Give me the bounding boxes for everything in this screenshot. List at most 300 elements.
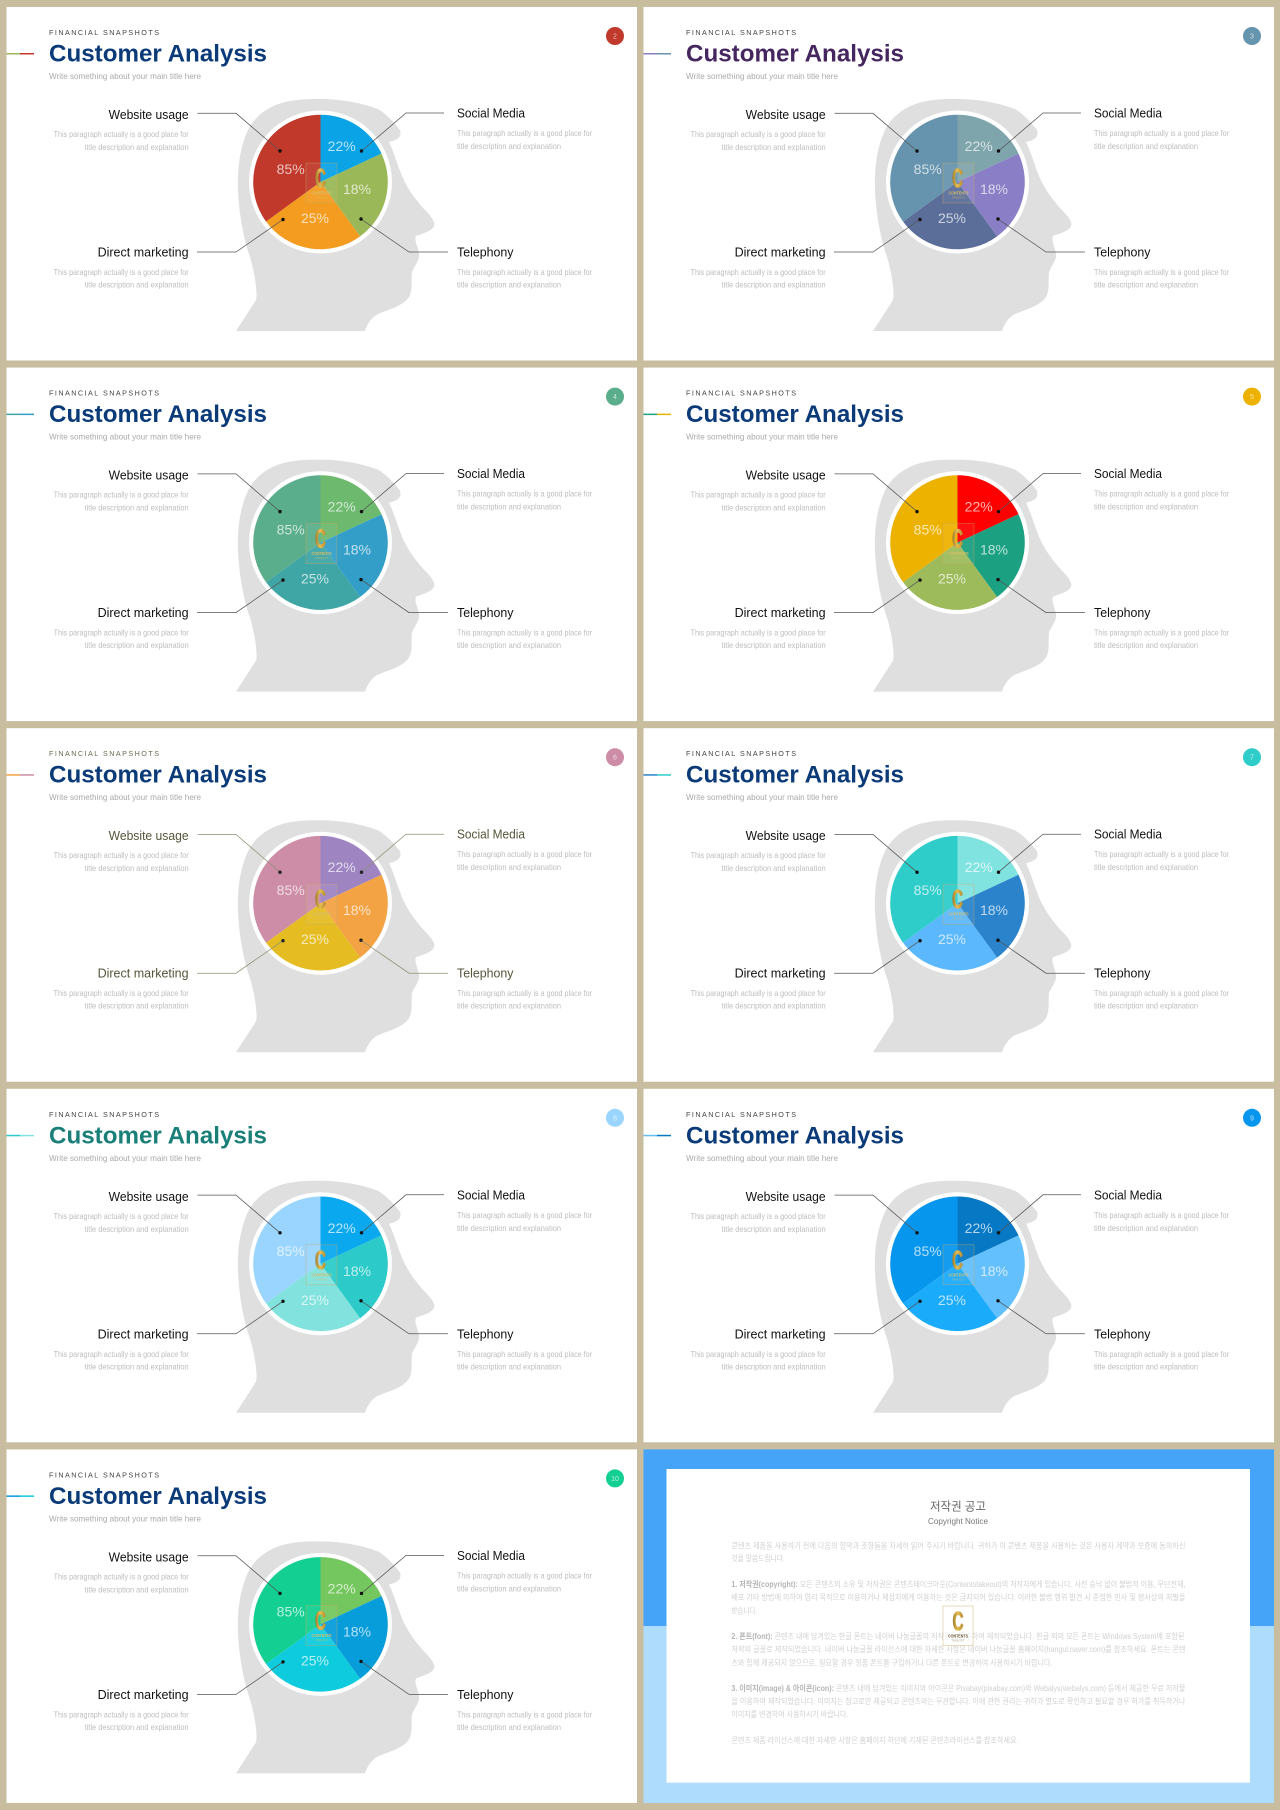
label: telephony: title description and explanation	[1094, 280, 1198, 290]
label: direct marketing: This paragraph actually is a good place for	[691, 268, 826, 277]
page badge	[606, 388, 624, 406]
label: website usage: title description and explanation	[85, 143, 189, 152]
label: telephony: This paragraph actually is a good place for	[457, 989, 592, 998]
logo watermark: CONTENTS	[948, 190, 969, 196]
panel: slide 6	[6, 728, 637, 1082]
label: telephony: title description and explanation	[457, 1002, 561, 1011]
leader lines	[197, 1195, 448, 1334]
label: social media: title description and explanation	[1094, 1224, 1198, 1233]
leader lines	[834, 113, 1085, 252]
label: direct marketing: This paragraph actually is a good place for	[691, 989, 826, 998]
label: social media: title description and explanation	[457, 142, 561, 151]
logo watermark: TAKEOUT	[315, 1638, 328, 1642]
pie chart: 22%	[328, 1220, 356, 1236]
title: Customer Analysis	[686, 401, 904, 428]
logo watermark: CONTENTS	[948, 1634, 968, 1638]
label: direct marketing: Direct marketing	[98, 967, 189, 981]
logo watermark: TAKEOUT	[315, 556, 328, 560]
title: Customer Analysis	[49, 1122, 267, 1149]
pie chart: 22%	[328, 1580, 356, 1596]
label: direct marketing: title description and explanation	[722, 641, 826, 650]
logo watermark: C	[952, 1245, 963, 1275]
pie chart: 22%	[328, 499, 356, 515]
panel: slide 8	[6, 1089, 637, 1442]
page badge: 7	[1250, 755, 1254, 762]
copyright body text: 것을 말씀드립니다.	[731, 1553, 785, 1563]
label: telephony: This paragraph actually is a good place for	[1094, 629, 1229, 638]
label: website usage	[54, 1550, 189, 1594]
label: website usage: This paragraph actually is a good place for	[691, 1212, 826, 1221]
title: Customer Analysis	[686, 762, 904, 789]
label: direct marketing	[691, 967, 826, 1011]
logo watermark	[306, 1605, 337, 1645]
label: telephony	[457, 967, 592, 1011]
leader lines	[834, 1195, 1085, 1334]
page badge: 9	[1250, 1115, 1254, 1122]
icon: head silhouette	[873, 460, 1071, 692]
label: telephony: title description and explanation	[457, 1362, 561, 1371]
eyebrow: FINANCIAL SNAPSHOTS	[49, 389, 159, 398]
logo watermark	[943, 524, 974, 564]
logo watermark	[306, 884, 337, 924]
copyright body text: 저작의 글꼴로 제작되었습니다. 네이버 나눔글꼴 라이선스에 대한 자세한 사항은 네이버 나눔글꼴 홈페이지(hangul.naver.com)를 참조하세요. 폰트는 콘텐	[731, 1644, 1185, 1654]
accent line	[6, 1135, 34, 1136]
label: direct marketing: This paragraph actually is a good place for	[54, 1350, 189, 1359]
label: social media: This paragraph actually is a good place for	[457, 1571, 592, 1580]
leader lines	[197, 834, 448, 973]
label: website usage: title description and explanation	[85, 1585, 189, 1594]
label: direct marketing: title description and explanation	[722, 1002, 826, 1011]
eyebrow: FINANCIAL SNAPSHOTS	[686, 1110, 796, 1119]
page badge: 2	[613, 34, 617, 40]
label: direct marketing	[54, 606, 189, 650]
panel: slide 10	[6, 1449, 637, 1803]
label: direct marketing	[691, 246, 826, 290]
label: website usage: This paragraph actually is a good place for	[54, 851, 189, 860]
label: social media: Social Media	[457, 106, 525, 120]
page badge: 8	[613, 1115, 617, 1122]
icon: head silhouette	[236, 1541, 434, 1773]
label: website usage: This paragraph actually is a good place for	[54, 491, 189, 500]
label: website usage	[54, 469, 189, 513]
label: direct marketing: This paragraph actually is a good place for	[54, 989, 189, 998]
icon: head silhouette	[873, 1181, 1071, 1413]
label: social media: This paragraph actually is a good place for	[1094, 1211, 1229, 1220]
label: website usage: title description and explanation	[85, 1225, 189, 1234]
icon: head silhouette	[873, 99, 1071, 331]
label: social media	[1094, 828, 1229, 872]
title: Customer Analysis	[49, 762, 267, 789]
title: Customer Analysis	[49, 1483, 267, 1510]
page badge	[1243, 27, 1261, 45]
accent line	[6, 53, 34, 54]
subtitle: Write something about your main title here	[49, 433, 201, 442]
label: telephony: title description and explanation	[457, 641, 561, 650]
label: social media: title description and explanation	[457, 1224, 561, 1233]
logo watermark: TAKEOUT	[951, 1638, 965, 1642]
logo watermark	[306, 163, 337, 203]
label: direct marketing: title description and explanation	[85, 641, 189, 650]
label: direct marketing: This paragraph actually is a good place for	[54, 1710, 189, 1719]
logo watermark: C	[315, 1245, 326, 1275]
label: telephony: title description and explanation	[1094, 641, 1198, 650]
label: social media: title description and explanation	[457, 863, 561, 872]
pie chart: 85%	[914, 522, 942, 538]
page badge: 10	[611, 1476, 619, 1483]
pie chart	[249, 471, 392, 614]
pie chart: 25%	[938, 571, 966, 587]
label: website usage: title description and explanation	[85, 504, 189, 513]
eyebrow: FINANCIAL SNAPSHOTS	[49, 1470, 159, 1479]
logo watermark: TAKEOUT	[952, 917, 965, 921]
page badge: 5	[1250, 394, 1254, 401]
label: social media: title description and explanation	[1094, 142, 1198, 151]
copyright body text: 3. 이미지(image) & 아이콘(icon): 콘텐츠 내에 담겨있는 이미지와 아이콘은 Pixabay(pixabay.com)와 Webalys(webalys.com) 등에서 제공한 무료 저작물	[731, 1683, 1185, 1693]
pie chart: 22%	[965, 138, 993, 154]
label: telephony: This paragraph actually is a good place for	[1094, 989, 1229, 998]
pie chart	[886, 110, 1029, 254]
leader lines	[834, 834, 1085, 973]
title: Customer Analysis	[49, 40, 267, 68]
label: telephony	[1094, 967, 1229, 1011]
label: telephony: Telephony	[1094, 1327, 1151, 1341]
pie chart: 85%	[914, 161, 942, 177]
icon: head silhouette	[236, 820, 434, 1052]
pie chart: 85%	[277, 1603, 305, 1619]
label: social media: This paragraph actually is a good place for	[457, 850, 592, 859]
label: website usage: Website usage	[109, 1550, 189, 1564]
label: social media: Social Media	[457, 467, 525, 481]
logo watermark: TAKEOUT	[315, 1277, 328, 1281]
copyright body text: 배포 기타 방법에 의하여 영리 목적으로 이용하거나 제삼자에게 이용하는 것은 금지되어 있습니다. 이러한 불법 행위 발견 시 준엄한 민사 및 형사상의 처벌을	[731, 1592, 1185, 1602]
label: direct marketing: This paragraph actually is a good place for	[691, 1350, 826, 1359]
label: direct marketing: This paragraph actually is a good place for	[54, 268, 189, 277]
accent line	[644, 774, 671, 776]
eyebrow: FINANCIAL SNAPSHOTS	[49, 1110, 159, 1119]
logo watermark: CONTENTS	[312, 1633, 332, 1638]
pie chart: 18%	[343, 181, 371, 197]
label: direct marketing: Direct marketing	[98, 606, 189, 620]
label: social media	[457, 1188, 592, 1233]
label: telephony	[457, 246, 592, 290]
label: social media: Social Media	[457, 828, 525, 842]
label: direct marketing	[54, 246, 189, 290]
logo watermark: C	[315, 524, 326, 554]
logo watermark: CONTENTS	[312, 190, 332, 196]
accent line	[6, 414, 34, 415]
subtitle: Write something about your main title here	[49, 72, 201, 81]
eyebrow: FINANCIAL SNAPSHOTS	[686, 389, 796, 398]
logo watermark: C	[952, 884, 963, 914]
label: social media	[457, 1549, 592, 1593]
copyright body text: 이미지를 변경하여 사용하시기 바랍니다.	[731, 1709, 848, 1719]
leader lines	[834, 474, 1085, 613]
label: social media: title description and explanation	[1094, 863, 1198, 872]
label: direct marketing	[691, 1327, 826, 1371]
subtitle: Write something about your main title here	[686, 433, 838, 442]
label: social media	[457, 106, 592, 151]
label: telephony	[1094, 246, 1229, 290]
label: social media: Social Media	[457, 1188, 525, 1202]
logo watermark: CONTENTS	[312, 551, 332, 556]
label: website usage	[691, 108, 826, 152]
label: social media	[457, 467, 592, 512]
logo watermark: TAKEOUT	[952, 196, 965, 200]
panel: slide 9	[644, 1089, 1274, 1442]
pie chart: 22%	[328, 859, 356, 875]
label: direct marketing: Direct marketing	[735, 967, 826, 981]
logo watermark: CONTENTS	[948, 551, 969, 556]
label: website usage: Website usage	[746, 1190, 826, 1204]
label: social media: Social Media	[1094, 1188, 1162, 1202]
panel: slide 5	[644, 368, 1274, 721]
label: direct marketing: Direct marketing	[735, 606, 826, 620]
title: Customer Analysis	[686, 40, 904, 68]
label: direct marketing: Direct marketing	[98, 246, 189, 260]
label: direct marketing: title description and explanation	[85, 1723, 189, 1732]
logo watermark: C	[952, 163, 963, 193]
label: telephony: title description and explanation	[1094, 1362, 1198, 1371]
pie chart: 25%	[938, 1292, 966, 1308]
label: website usage: title description and explanation	[722, 143, 826, 152]
label: telephony: This paragraph actually is a good place for	[1094, 268, 1229, 277]
pie chart: 22%	[965, 859, 993, 875]
label: direct marketing	[54, 1327, 189, 1371]
panel: copyright notice	[644, 1449, 1274, 1803]
label: telephony	[457, 1327, 592, 1371]
label: website usage	[54, 1190, 189, 1234]
logo watermark: CONTENTS	[948, 912, 969, 917]
pie chart: 25%	[301, 1292, 329, 1308]
label: telephony: Telephony	[457, 1688, 514, 1702]
label: social media: This paragraph actually is a good place for	[1094, 850, 1229, 859]
label: social media: This paragraph actually is a good place for	[457, 1211, 592, 1220]
panel: slide 4	[6, 368, 637, 721]
logo watermark: CONTENTS	[312, 912, 332, 917]
label: telephony	[1094, 606, 1229, 650]
panel: slide 7	[644, 728, 1274, 1082]
pie chart	[249, 1192, 392, 1335]
page badge: 6	[613, 755, 617, 762]
pie chart: 18%	[980, 542, 1008, 558]
page badge	[606, 748, 624, 766]
label: website usage	[691, 469, 826, 513]
logo watermark: TAKEOUT	[952, 1277, 965, 1281]
pie chart: 18%	[980, 181, 1008, 197]
copyright body text: 받습니다.	[731, 1606, 757, 1616]
label: social media: This paragraph actually is a good place for	[457, 129, 592, 138]
logo watermark: C	[952, 524, 963, 554]
label: website usage: This paragraph actually is a good place for	[691, 491, 826, 500]
pie chart	[886, 832, 1029, 975]
pie chart: 18%	[980, 1263, 1008, 1279]
label: direct marketing: Direct marketing	[735, 1327, 826, 1341]
label: telephony: Telephony	[1094, 967, 1151, 981]
label: website usage: Website usage	[746, 108, 826, 122]
logo watermark: CONTENTS	[312, 1272, 332, 1277]
subtitle: Write something about your main title here	[686, 793, 838, 802]
logo watermark	[943, 1606, 973, 1646]
pie chart	[249, 832, 392, 975]
pie chart: 18%	[343, 542, 371, 558]
logo watermark: TAKEOUT	[315, 917, 328, 921]
pie chart	[886, 471, 1029, 614]
page badge	[1243, 1109, 1261, 1127]
label: website usage: Website usage	[746, 829, 826, 843]
label: telephony: This paragraph actually is a good place for	[457, 1350, 592, 1359]
pie chart	[249, 110, 392, 254]
pie chart: 18%	[343, 1263, 371, 1279]
title: Customer Analysis	[49, 401, 267, 428]
label: telephony: This paragraph actually is a good place for	[457, 268, 592, 277]
accent line	[6, 774, 34, 776]
icon: head silhouette	[236, 460, 434, 692]
pie chart	[886, 1192, 1029, 1335]
label: social media: This paragraph actually is a good place for	[1094, 129, 1229, 138]
page badge	[1243, 388, 1261, 406]
accent line	[6, 1495, 34, 1497]
label: website usage: This paragraph actually is a good place for	[691, 130, 826, 139]
label: direct marketing: Direct marketing	[98, 1327, 189, 1341]
label: telephony	[457, 1688, 592, 1732]
label: telephony	[1094, 1327, 1229, 1371]
pie chart: 85%	[277, 882, 305, 898]
label: direct marketing: Direct marketing	[735, 246, 826, 260]
logo watermark: C	[315, 884, 326, 914]
label: telephony: title description and explanation	[1094, 1002, 1198, 1011]
logo watermark: TAKEOUT	[952, 556, 965, 560]
label: social media: Social Media	[457, 1549, 525, 1563]
label: social media: Social Media	[1094, 106, 1162, 120]
label: telephony: title description and explanation	[457, 1723, 561, 1732]
pie chart: 85%	[914, 1243, 942, 1259]
copyright body text: 콘텐츠 제품을 사용하기 전에 다음의 협약과 조항들을 자세히 읽어 주시기 바랍니다. 귀하가 이 콘텐츠 제품을 사용하는 것은 사용자 계약과 보증에 동의하신	[731, 1540, 1185, 1550]
label: direct marketing: title description and explanation	[85, 280, 189, 290]
logo watermark: C	[315, 1605, 326, 1635]
eyebrow: FINANCIAL SNAPSHOTS	[49, 28, 159, 37]
label: social media: Social Media	[1094, 467, 1162, 481]
label: direct marketing	[691, 606, 826, 650]
label: direct marketing	[54, 1688, 189, 1732]
pie chart: 18%	[343, 1623, 371, 1639]
pie chart: 25%	[301, 931, 329, 947]
label: direct marketing: This paragraph actually is a good place for	[54, 629, 189, 638]
label: telephony: This paragraph actually is a good place for	[457, 629, 592, 638]
label: social media	[457, 828, 592, 872]
copyright body text: 2. 폰트(font): 콘텐츠 내에 담겨있는 한글 폰트는 네이버 나눔글꼴의 저작권을 준수하여 제작되었습니다. 한글 외의 모든 폰트는 Windows System에 포함된	[731, 1631, 1184, 1641]
subtitle: Write something about your main title here	[686, 1154, 838, 1163]
logo watermark	[943, 884, 974, 924]
label: social media: title description and explanation	[457, 503, 561, 512]
logo watermark: C	[315, 163, 326, 193]
label: website usage: This paragraph actually is a good place for	[54, 1572, 189, 1581]
pie chart	[249, 1553, 392, 1696]
subtitle: Write something about your main title here	[686, 72, 838, 81]
label: direct marketing: title description and explanation	[85, 1002, 189, 1011]
copyright body text	[731, 1540, 1186, 1745]
logo watermark: TAKEOUT	[315, 196, 328, 200]
pie chart: 85%	[277, 522, 305, 538]
copyright body text: 1. 저작권(copyright): 모든 콘텐츠의 소유 및 저작권은 콘텐츠테이크아웃(Contentstakeout)의 저작자에게 있습니다. 사전 승낙 없이 불법적 이용, 무단전재,	[731, 1579, 1185, 1589]
label: website usage: title description and explanation	[722, 864, 826, 873]
copyright subheading: Copyright Notice	[928, 1516, 988, 1526]
logo watermark	[943, 163, 974, 203]
logo watermark: CONTENTS	[948, 1272, 969, 1277]
pie chart: 22%	[328, 138, 356, 154]
leader lines	[197, 474, 448, 613]
label: telephony	[457, 606, 592, 650]
eyebrow: FINANCIAL SNAPSHOTS	[686, 28, 796, 37]
accent line	[644, 414, 671, 415]
accent line	[644, 53, 671, 54]
subtitle: Write something about your main title here	[49, 1154, 201, 1163]
label: social media: This paragraph actually is a good place for	[457, 490, 592, 499]
pie chart: 85%	[914, 882, 942, 898]
label: website usage	[54, 829, 189, 873]
label: website usage: Website usage	[746, 469, 826, 483]
label: social media	[1094, 106, 1229, 151]
leader lines	[197, 1555, 448, 1694]
pie chart: 85%	[277, 1243, 305, 1259]
pie chart: 22%	[965, 499, 993, 515]
page badge	[606, 1469, 624, 1487]
page badge	[606, 27, 624, 45]
pie chart: 25%	[938, 210, 966, 226]
label: direct marketing: title description and explanation	[722, 1362, 826, 1371]
label: telephony: title description and explanation	[457, 280, 561, 290]
label: social media: title description and explanation	[457, 1584, 561, 1593]
icon: head silhouette	[236, 99, 434, 331]
copyright body text: 츠와 함께 제공되지 않으므로, 필요할 경우 정품 폰트를 구입하거나 다른 폰트로 변경하여 사용하시기 바랍니다.	[731, 1658, 1052, 1668]
eyebrow: FINANCIAL SNAPSHOTS	[686, 749, 796, 758]
logo watermark	[306, 524, 337, 564]
logo watermark	[943, 1245, 974, 1285]
label: website usage: Website usage	[109, 1190, 189, 1204]
copyright heading: 저작권 공고	[930, 1500, 986, 1514]
label: website usage: This paragraph actually is a good place for	[54, 1212, 189, 1221]
label: website usage	[691, 829, 826, 873]
pie chart: 25%	[301, 1652, 329, 1668]
label: direct marketing: title description and explanation	[85, 1362, 189, 1371]
page badge: 4	[613, 394, 617, 401]
accent line	[644, 1135, 671, 1136]
label: social media	[1094, 1188, 1229, 1233]
label: website usage: title description and explanation	[85, 864, 189, 873]
leader lines	[197, 113, 448, 252]
label: social media: This paragraph actually is a good place for	[1094, 490, 1229, 499]
label: website usage	[691, 1190, 826, 1234]
subtitle: Write something about your main title here	[49, 793, 201, 802]
copyright body text: 콘텐츠 제품 라이선스에 대한 자세한 사항은 홈페이지 하단에 기재된 콘텐츠라이선스를 참조하세요.	[731, 1735, 1018, 1745]
label: telephony: This paragraph actually is a good place for	[1094, 1350, 1229, 1359]
page badge: 3	[1250, 34, 1254, 40]
icon: head silhouette	[236, 1181, 434, 1413]
label: direct marketing: title description and explanation	[722, 280, 826, 290]
label: website usage: This paragraph actually is a good place for	[54, 130, 189, 139]
label: telephony: Telephony	[457, 246, 514, 260]
label: website usage	[54, 108, 189, 152]
label: telephony: Telephony	[1094, 606, 1151, 620]
label: website usage: Website usage	[109, 469, 189, 483]
title: Customer Analysis	[686, 1122, 904, 1149]
page badge	[1243, 748, 1261, 766]
label: social media: Social Media	[1094, 828, 1162, 842]
label: website usage: title description and explanation	[722, 1225, 826, 1234]
copyright body text: 을 이용하여 제작되었습니다. 이미지는 참고로만 제공되고 콘텐츠와는 무관합니다. 이에 관한 권리는 귀하가 별도로 확인하고 필요할 경우 허가를 취득하거나	[731, 1696, 1186, 1706]
pie chart: 25%	[938, 931, 966, 947]
label: direct marketing	[54, 967, 189, 1011]
pie chart: 22%	[965, 1220, 993, 1236]
